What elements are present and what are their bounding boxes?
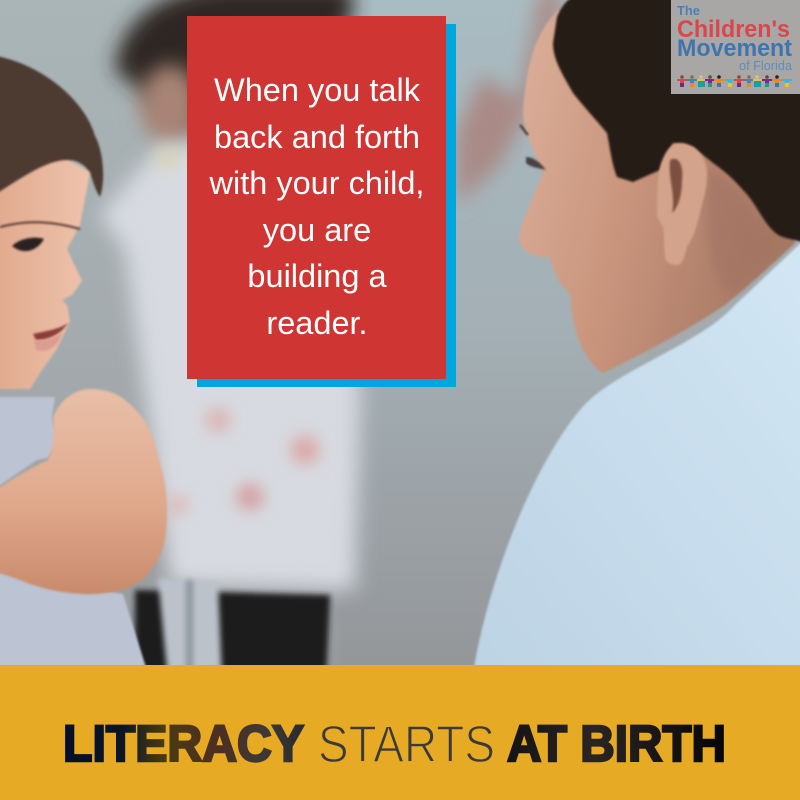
woman ear — [657, 143, 707, 265]
footer headline — [63, 715, 726, 774]
toddler hair — [0, 55, 103, 198]
toddler shirt — [0, 397, 150, 680]
toddler eye and mouth — [0, 222, 80, 351]
callout text: reader. — [266, 305, 368, 341]
woman neck shadow — [706, 165, 775, 292]
callout panel: red — [187, 16, 446, 379]
photo: blurred child in background — [100, 0, 360, 680]
callout text: When you talk — [214, 72, 421, 108]
photo: toddler — [0, 55, 167, 680]
photo: woman — [472, 0, 800, 680]
photo: blurred raised arm — [456, 0, 565, 205]
woman eye and brow — [520, 125, 546, 170]
footer headline: AT BIRTH — [507, 715, 726, 772]
toddler arm — [0, 389, 167, 594]
footer headline: LITERACY — [63, 715, 304, 772]
woman face and neck — [519, 10, 795, 373]
callout text: you are — [263, 212, 371, 248]
logo wordmark: Children's — [677, 16, 790, 43]
woman shirt — [472, 225, 800, 680]
footer banner — [0, 665, 800, 800]
callout shadow: blue offset panel — [197, 24, 456, 387]
woman hair — [553, 0, 800, 245]
logo wordmark — [677, 3, 793, 73]
woman inner ear — [670, 159, 682, 213]
callout text: building a — [247, 258, 387, 294]
logo wordmark: of Florida — [739, 58, 793, 73]
callout text: with your child, — [209, 165, 424, 201]
logo row of children — [677, 75, 792, 87]
footer headline: STARTS — [318, 716, 495, 774]
logo wordmark: The — [677, 3, 700, 18]
callout text: back and forth — [214, 119, 420, 155]
logo panel — [671, 0, 800, 94]
callout text — [209, 72, 424, 341]
toddler face — [0, 150, 90, 389]
logo wordmark: Movement — [677, 35, 792, 62]
